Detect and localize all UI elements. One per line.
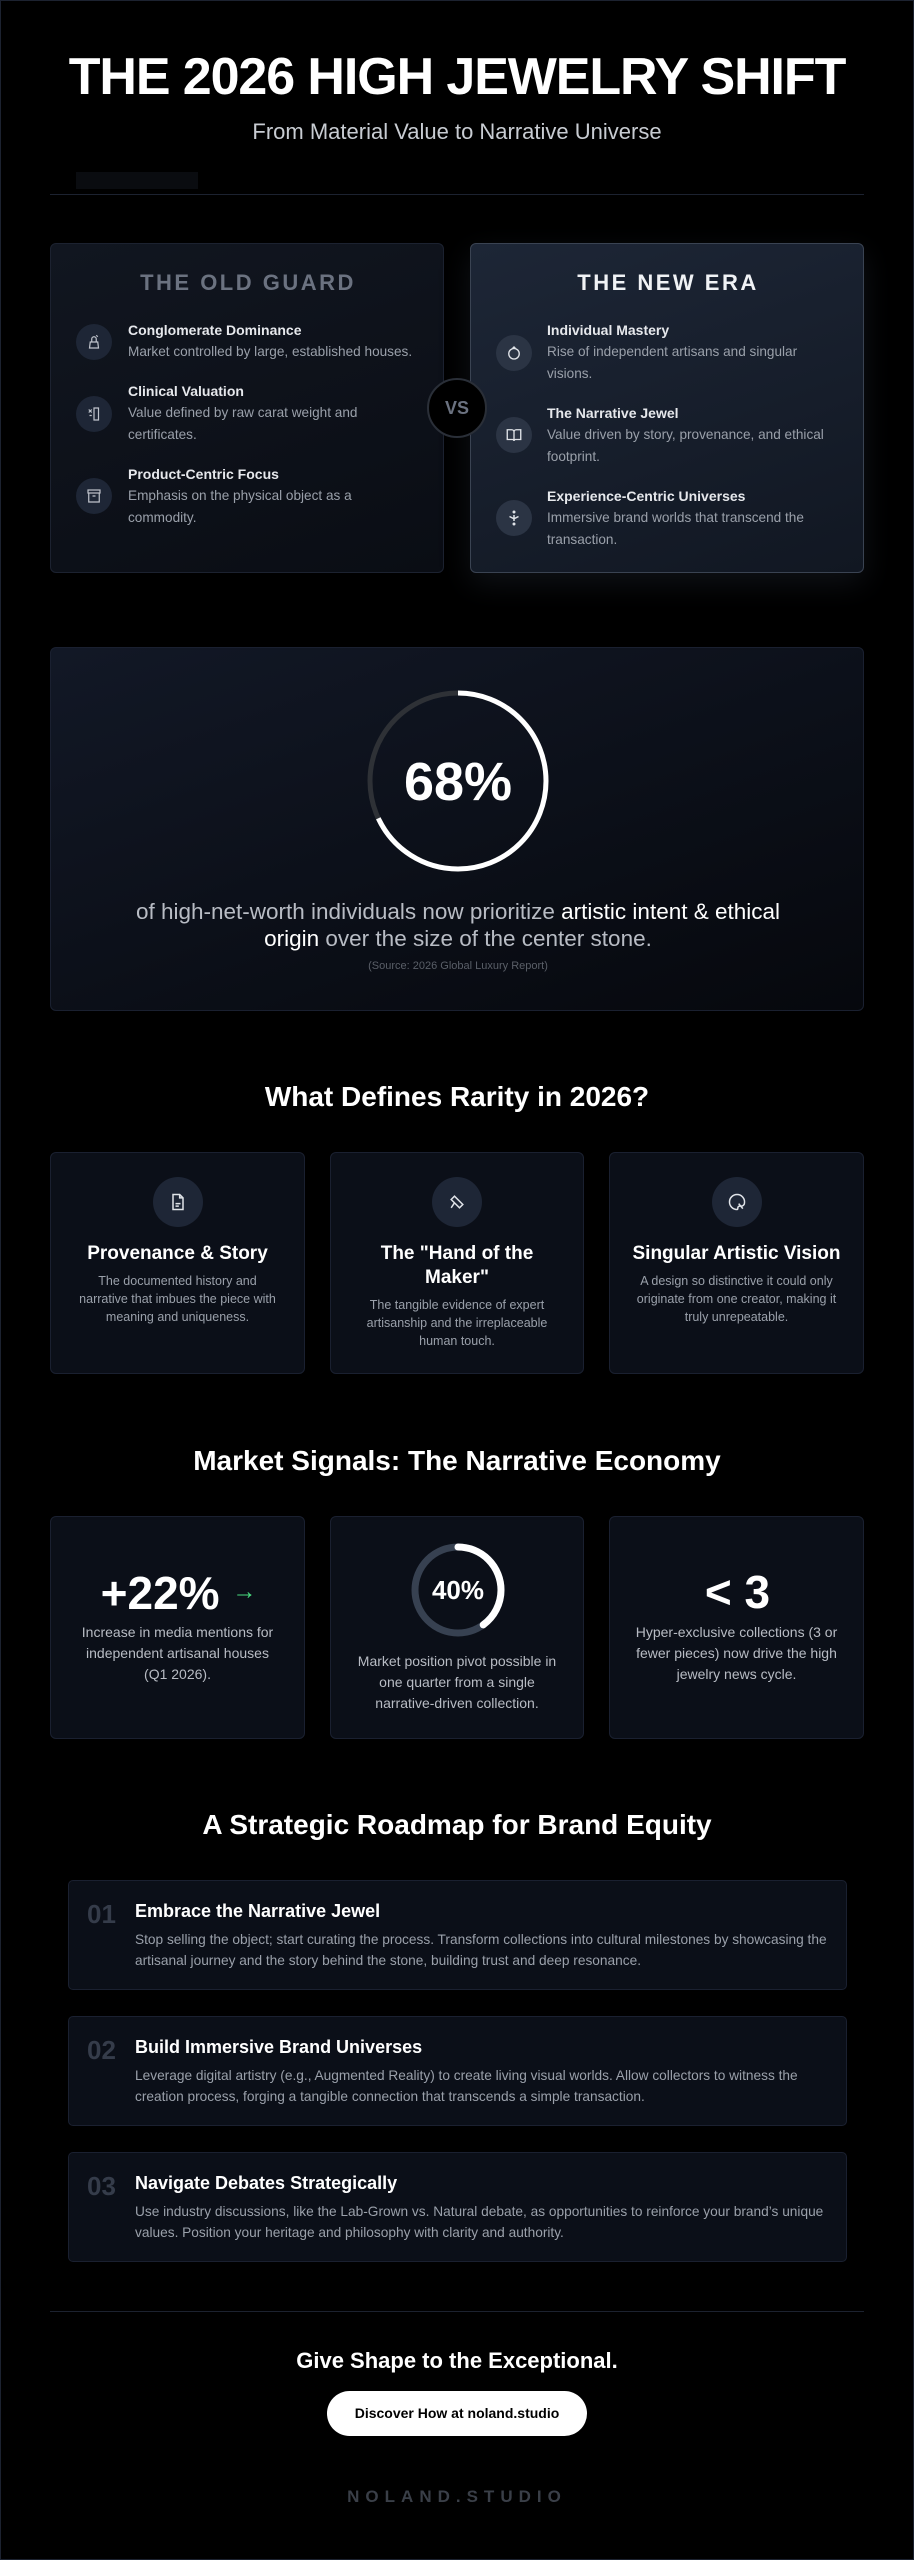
item: product-centric focus: [128, 466, 352, 525]
roadmap step 03: 03: [87, 2171, 116, 2201]
item: narrative jewel: The Narrative Jewel: [547, 405, 679, 421]
item: conglomerate dominance: [128, 322, 412, 359]
card: singular vision: A design so distinctive it could only originate from one creator, making it truly unrepeatable.: [637, 1274, 836, 1324]
vs badge: VS: [445, 398, 469, 418]
icon: palette: [712, 1177, 762, 1227]
icon: book: [496, 417, 532, 453]
subtitle: From Material Value to Narrative Universe: [252, 119, 662, 144]
roadmap step 01: Stop selling the object; start curating the process. Transform collections into cultural milestones by showcasing the artisanal journey and the story behind the stone, building trust and deep resonance.: [135, 1932, 827, 1968]
card: 40%: [330, 1516, 584, 1739]
card: < 3: Hyper-exclusive collections (3 or fewer pieces) now drive the high jewelry news cycle.: [636, 1624, 837, 1682]
stat text: of high-net-worth individuals now prioritize artistic intent & ethical origin over the size of the center stone.: [136, 899, 780, 951]
heading: rarity: What Defines Rarity in 2026?: [265, 1081, 649, 1112]
item: conglomerate dominance: Conglomerate Dominance: [128, 322, 301, 338]
title: THE 2026 HIGH JEWELRY SHIFT: [69, 48, 845, 106]
item: clinical valuation: [128, 383, 357, 442]
item: narrative jewel: Value driven by story, provenance, and ethical footprint.: [547, 427, 824, 464]
chart: 68% ring: 68%: [404, 752, 512, 812]
card: hand of maker: The tangible evidence of expert artisanship and the irreplaceable human touch.: [367, 1298, 547, 1348]
roadmap step 03: Use industry discussions, like the Lab-Grown vs. Natural debate, as opportunities to reinforce your brand’s unique values. Position your heritage and philosophy with clarity and authority.: [135, 2204, 823, 2240]
cta button: [327, 2391, 587, 2436]
item: product-centric focus: Product-Centric Focus: [128, 466, 279, 482]
roadmap step 01: [68, 1880, 847, 1990]
card: provenance: Provenance & Story: [87, 1243, 268, 1264]
card: hand of maker: [330, 1152, 584, 1374]
item: product-centric focus: Emphasis on the physical object as a commodity.: [128, 488, 352, 524]
card: 40%: Market position pivot possible in one quarter from a single narrative-driven collection.: [358, 1653, 556, 1711]
roadmap step 02: 02: [87, 2035, 116, 2065]
item: conglomerate dominance: Market controlled by large, established houses.: [128, 344, 412, 359]
item: individual mastery: Individual Mastery: [547, 322, 669, 338]
vs badge: [427, 378, 487, 438]
card: singular vision: Singular Artistic Vision: [632, 1243, 840, 1264]
roadmap step 01: Embrace the Narrative Jewel: [135, 1901, 380, 1921]
item: individual mastery: Rise of independent artisans and singular visions.: [547, 344, 797, 380]
chart: 40% ring: 40%: [432, 1575, 484, 1605]
heading: roadmap: A Strategic Roadmap for Brand Equity: [202, 1809, 712, 1840]
roadmap step 01: 01: [87, 1899, 116, 1929]
card: provenance: The documented history and narrative that imbues the piece with meaning and uniqueness.: [79, 1274, 276, 1324]
cta heading: Give Shape to the Exceptional.: [296, 2348, 618, 2373]
icon: document: [152, 1177, 202, 1227]
chart: 40% ring: [412, 1544, 504, 1636]
heading: old guard: THE OLD GUARD: [140, 270, 356, 295]
card: +22%: [50, 1516, 305, 1739]
icon: product: [76, 478, 112, 514]
icon: mastery: [496, 335, 532, 371]
item: individual mastery: [547, 322, 797, 380]
panel: 68% stat: [50, 647, 864, 1011]
card: singular vision: [609, 1152, 864, 1374]
roadmap step 03: Navigate Debates Strategically: [135, 2173, 397, 2193]
footer brand: NOLAND.STUDIO: [347, 2487, 567, 2506]
icon: conglomerate: [76, 324, 112, 360]
item: narrative jewel: [547, 405, 824, 464]
item: experience universes: Experience-Centric Universes: [547, 488, 745, 504]
roadmap step 02: Build Immersive Brand Universes: [135, 2037, 422, 2057]
card: < 3: [609, 1516, 864, 1739]
item: clinical valuation: Clinical Valuation: [128, 383, 244, 399]
source: (Source: 2026 Global Luxury Report): [368, 960, 548, 972]
chart: 68% ring: [368, 690, 548, 872]
cta button: Discover How at noland.studio: [355, 2405, 559, 2421]
icon: universes: [496, 500, 532, 536]
card: hand of maker: Maker": [425, 1267, 489, 1288]
stat: < 3: < 3: [705, 1566, 770, 1618]
panel: new era: [470, 243, 864, 573]
panel: old guard: [50, 243, 444, 573]
stat: +22% with arrow: +22% →: [101, 1567, 256, 1619]
roadmap step 03: [68, 2152, 847, 2262]
item: experience universes: Immersive brand worlds that transcend the transaction.: [547, 510, 804, 546]
card: hand of maker: The "Hand of the: [381, 1243, 533, 1264]
icon: tool: [432, 1177, 482, 1227]
card: +22%: Increase in media mentions for independent artisanal houses (Q1 2026).: [82, 1624, 273, 1682]
roadmap step 02: [68, 2016, 847, 2126]
roadmap step 02: Leverage digital artistry (e.g., Augmented Reality) to create living visual worlds. Allow collectors to witness the creation process, forging a tangible connection that transcends a simple transaction.: [135, 2068, 798, 2104]
item: experience universes: [547, 488, 804, 546]
icon: clinical: [76, 396, 112, 432]
card: provenance: [50, 1152, 305, 1374]
heading: new era: THE NEW ERA: [577, 270, 759, 295]
heading: market signals: Market Signals: The Narrative Economy: [193, 1445, 721, 1476]
item: clinical valuation: Value defined by raw carat weight and certificates.: [128, 405, 357, 442]
